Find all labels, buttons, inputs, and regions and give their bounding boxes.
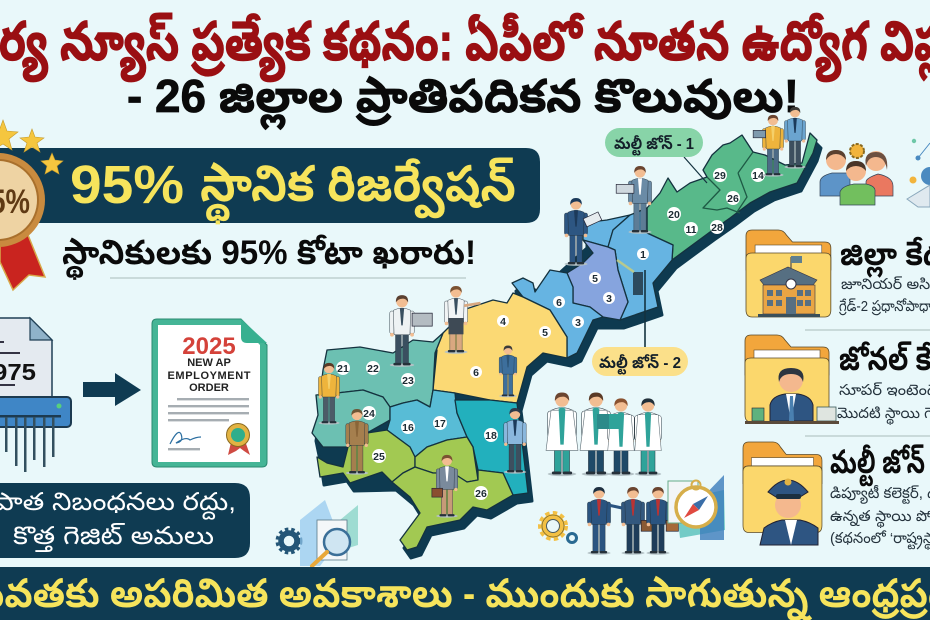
district numbers: 5 — [542, 327, 548, 339]
district numbers: 28 — [711, 222, 723, 234]
callout: multi zone 2: మల్టీ జోన్ - 2 — [599, 354, 681, 375]
figure: khaki officer — [346, 409, 368, 475]
figure: man with folder top right — [784, 107, 806, 169]
group: business people shaking hands — [587, 487, 678, 555]
figure: police officer — [564, 198, 602, 266]
icon: folder with officer — [745, 335, 839, 424]
icon: old 1975 order in shredder — [0, 318, 71, 472]
icon: team of three with gear — [820, 144, 893, 205]
icon: folder with peaked cap officer — [743, 442, 822, 545]
banner heading: స్థానిక రిజర్వేషన్ — [200, 156, 516, 225]
region: light blue 16 17 — [387, 390, 467, 457]
figure: woman with clipboard, zone 1 — [616, 166, 652, 234]
description — [839, 276, 930, 317]
region: north coast green — [647, 133, 817, 260]
callout: multi zone 1: మల్టీ జోన్ - 1 — [614, 135, 694, 156]
region: green north 26 — [415, 437, 478, 482]
district numbers: 26 — [727, 193, 739, 205]
district numbers: 3 — [575, 317, 581, 329]
district numbers: 26 — [475, 488, 487, 500]
district numbers: 11 — [685, 224, 697, 236]
doctor 1 — [546, 393, 578, 476]
figure: man with laptop — [390, 295, 432, 367]
panel: old rules cancelled, new gazette — [0, 483, 250, 558]
businessman 3 — [646, 487, 678, 555]
icon: 2025 new employment order document: NEW AP — [187, 357, 231, 369]
icon: 2025 new employment order document: ORDER — [189, 382, 229, 394]
icon: blue gear left — [277, 529, 301, 553]
district numbers: 20 — [668, 209, 680, 221]
district numbers: 22 — [367, 363, 379, 375]
icon: 2025 new employment order document — [152, 319, 267, 467]
figure: woman presenter — [444, 286, 480, 354]
businessman 1 — [587, 487, 611, 555]
callout: multi zone 1 — [605, 128, 707, 183]
district numbers: 29 — [714, 170, 726, 182]
figure: woman with tablet top right — [753, 115, 784, 177]
banner heading — [70, 155, 516, 225]
icon: small blue gear — [568, 534, 576, 542]
panel: 95 percent reservation banner — [0, 148, 540, 225]
region: zone 1 blue — [608, 208, 673, 320]
district numbers: 23 — [402, 375, 414, 387]
figure: worker in blue — [499, 346, 517, 397]
icon: folder with school — [746, 230, 831, 317]
icon: gold medal with ribbon — [0, 120, 63, 290]
region: teal 24 — [312, 390, 390, 447]
district numbers: 18 — [485, 430, 497, 442]
icon: compass with documents — [668, 475, 725, 540]
doctor 4 — [635, 398, 661, 476]
doctor 2 — [580, 393, 612, 476]
title: - 26 జిల్లాల ప్రాతిపదికన కొలువులు! — [127, 70, 799, 130]
figure: officer in light blue — [504, 408, 526, 474]
subtitle: local quota: స్థానికులకు 95% కోటా ఖరారు! — [62, 234, 476, 280]
icon: data document with magnifier — [300, 500, 358, 566]
figure: woman with briefcase — [432, 455, 458, 518]
region: yellow — [433, 293, 567, 403]
district numbers: 17 — [434, 418, 446, 430]
map of Andhra Pradesh — [312, 133, 817, 550]
businessman 2 — [621, 487, 653, 555]
district numbers: 4 — [500, 316, 506, 328]
description — [837, 382, 930, 425]
region: teal 18 — [455, 400, 528, 495]
panel: old rules cancelled, new gazette: కొత్త గెజిట్ అమలు — [13, 522, 214, 552]
panel: multi zone cadre — [743, 442, 930, 550]
banner heading: 95% — [70, 155, 184, 215]
map of Andhra Pradesh shadow — [316, 141, 821, 558]
panel: zonal cadre — [745, 335, 930, 425]
district numbers: 6 — [556, 297, 562, 309]
district numbers: 3 — [606, 293, 612, 305]
district numbers: 21 — [337, 363, 349, 375]
region: teal north west — [320, 333, 443, 407]
region: light blue top — [583, 215, 630, 247]
arrow: old to new — [83, 373, 141, 406]
callout: multi zone 2 — [592, 260, 688, 376]
region: west blue — [512, 270, 603, 358]
district numbers: 1 — [640, 249, 646, 261]
district numbers — [336, 168, 765, 500]
district numbers: 16 — [402, 422, 414, 434]
district numbers: 24 — [363, 408, 375, 420]
panel: old rules cancelled, new gazette: పాత నిబంధనలు రద్దు, — [0, 488, 236, 520]
description — [830, 484, 930, 550]
title — [0, 12, 930, 130]
group: doctors — [546, 393, 661, 476]
region: green south 26 — [392, 467, 513, 550]
icon: yellow gear — [541, 514, 565, 538]
region: green 25 — [317, 430, 415, 483]
figure: woman in yellow — [318, 363, 340, 425]
icon: 2025 new employment order document: 2025 — [182, 333, 236, 360]
district numbers: 6 — [473, 367, 479, 379]
panel: district cadre — [746, 230, 930, 317]
doctor 3 — [608, 398, 634, 476]
district numbers: 25 — [373, 451, 385, 463]
icon: documents with data dots — [907, 139, 930, 207]
icon: 2025 new employment order document: EMPLOYMENT — [168, 370, 251, 382]
region: periwinkle — [567, 240, 628, 320]
district numbers: 14 — [752, 170, 764, 182]
district numbers: 5 — [592, 273, 598, 285]
